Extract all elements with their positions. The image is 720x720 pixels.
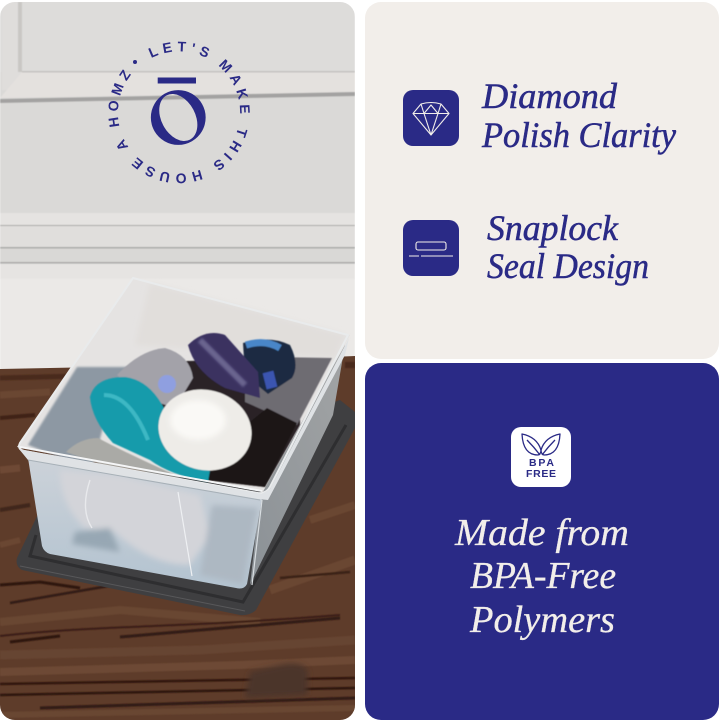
yarn: black block (205, 408, 297, 487)
box right face (250, 345, 345, 585)
logo badge: Let's make this house a Homz (108, 42, 250, 184)
photo: yarn in clear storage box (0, 0, 355, 720)
yarn: grey fuzzy (245, 357, 332, 425)
logo ring (151, 90, 206, 145)
box interior (17, 356, 338, 492)
icon: snaplock seal (403, 220, 459, 276)
heading: Polymers (469, 599, 615, 641)
yarn: dark underlay (150, 358, 300, 487)
icon: diamond (403, 90, 459, 146)
box rim (19, 278, 348, 493)
yarn (66, 333, 332, 487)
yarn: teal skein (90, 377, 210, 482)
yarn: white ball (158, 388, 252, 472)
icon: BPA free badge: FREE (526, 468, 556, 480)
heading: Seal Design (487, 246, 649, 286)
grey yarn seen through front (60, 470, 258, 584)
panel: BPA free (365, 363, 719, 720)
floor stain (245, 664, 308, 698)
heading: Made from (454, 512, 629, 554)
yarn: blue skein (243, 339, 296, 394)
logo bar (158, 78, 196, 84)
wooden floor (0, 356, 355, 720)
icon: BPA free badge: BPA (529, 457, 554, 469)
box front face (28, 458, 262, 588)
heading: Snaplock (487, 208, 619, 248)
feature: diamond polish clarity (403, 76, 676, 155)
heading: Diamond (481, 76, 618, 116)
storage lid tray (17, 400, 355, 615)
yarn: grey front skein (66, 438, 182, 478)
slogan dot (133, 60, 137, 64)
icon: BPA free badge (511, 427, 571, 487)
yarn: purple skein (188, 333, 260, 398)
box side highlights (135, 283, 345, 358)
wall and moulding (0, 0, 355, 372)
panel: features (365, 2, 719, 359)
heading: Polish Clarity (481, 115, 676, 155)
circular slogan: LET'S MAKE THIS HOUSE A HOMZ (108, 42, 250, 184)
clear plastic box (17, 278, 350, 588)
yarn: grey ball (117, 348, 193, 408)
heading: BPA-Free (470, 555, 616, 597)
feature: snaplock seal design (403, 208, 649, 286)
